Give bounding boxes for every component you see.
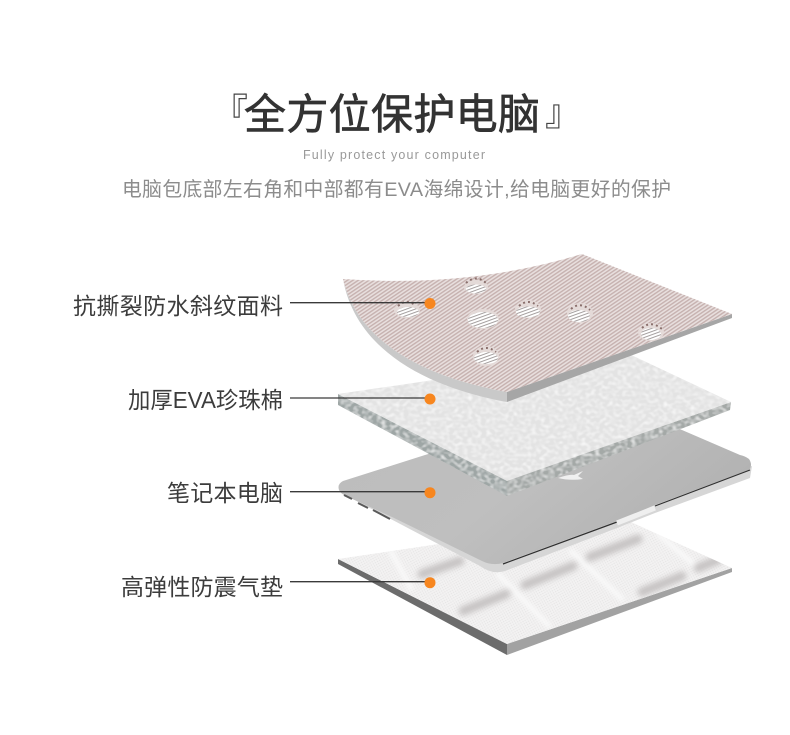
- layer: laptop: [338, 400, 752, 572]
- title: 全方位保护电脑: [244, 91, 540, 138]
- subtitle: english: Fully protect your computer: [303, 148, 485, 162]
- callout: EVA: 加厚EVA珍珠棉: [128, 387, 283, 413]
- callout: EVA: [128, 387, 436, 413]
- callout: laptop: 笔记本电脑: [167, 480, 283, 506]
- layer: waterproof twill fabric: [343, 254, 732, 402]
- description text: 电脑包底部左右角和中部都有EVA海绵设计,给电脑更好的保护: [122, 179, 671, 201]
- callout: fabric: [73, 293, 436, 319]
- icon: laptop logo: [558, 471, 583, 480]
- callout: fabric: 抗撕裂防水斜纹面料: [73, 293, 283, 319]
- callout: air cushion: [121, 574, 436, 600]
- water droplets: [394, 278, 664, 366]
- title: 』: [545, 92, 581, 133]
- layer: elastic air cushion pad: [338, 517, 732, 655]
- callout: air cushion: 高弹性防震气垫: [121, 574, 283, 600]
- callout: laptop: [167, 480, 436, 506]
- layer: thick EVA foam: [338, 352, 731, 496]
- title: 『: [212, 91, 248, 132]
